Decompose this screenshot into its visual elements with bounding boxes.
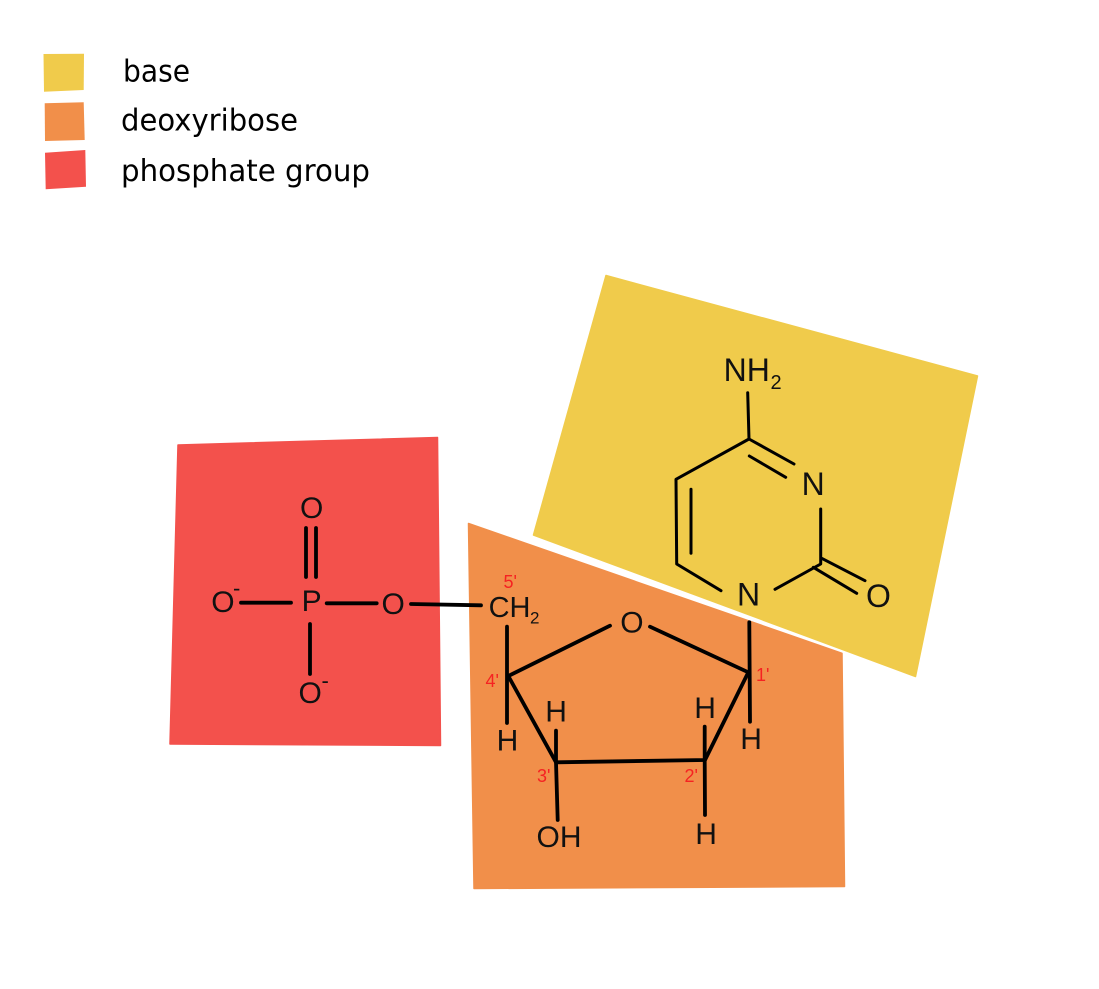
deoxyribose structure: 1' — [756, 665, 769, 685]
deoxyribose structure — [486, 572, 769, 854]
sugar ring bonds — [508, 626, 748, 762]
legend swatch: deoxyribose — [45, 102, 85, 141]
carbon numbers: 5' — [504, 572, 517, 592]
base structure: O — [866, 578, 891, 614]
panel: phosphate group — [170, 438, 440, 746]
phosphate structure: P — [302, 585, 322, 618]
legend label: deoxyribose: deoxyribose — [121, 104, 298, 138]
deoxyribose structure: 3' — [537, 766, 550, 786]
deoxyribose structure: H — [740, 723, 762, 756]
base structure — [676, 352, 891, 614]
phosphate structure: O — [298, 677, 322, 710]
substituent bonds — [507, 622, 750, 820]
deoxyribose structure: 2 — [530, 608, 539, 628]
phosphate structure: O — [382, 588, 405, 621]
deoxyribose structure: 2' — [684, 766, 698, 786]
base structure: N — [737, 577, 760, 613]
deoxyribose structure: H — [695, 818, 717, 851]
deoxyribose structure: H — [694, 692, 716, 725]
phosphate structure — [211, 492, 481, 710]
legend label: phosphate group: phosphate group — [121, 154, 370, 189]
legend — [44, 54, 370, 189]
deoxyribose structure: O — [620, 606, 644, 640]
atom labels: NH — [724, 352, 770, 388]
deoxyribose structure: H — [497, 725, 518, 758]
legend label: base: base — [123, 54, 190, 90]
cytosine ring bonds — [676, 393, 865, 593]
phosphate structure: O — [211, 586, 235, 619]
panel: base — [534, 276, 978, 676]
deoxyribose structure: OH — [536, 821, 582, 854]
deoxyribose structure: 4' — [486, 671, 499, 691]
phosphate structure: - — [233, 576, 240, 601]
base structure: 2 — [770, 372, 782, 394]
atom labels: O — [300, 492, 323, 525]
legend swatch: base — [44, 54, 84, 92]
base structure: N — [802, 466, 825, 502]
atom labels: CH — [489, 592, 530, 624]
phosphate structure: - — [322, 668, 329, 693]
deoxyribose structure: H — [545, 696, 567, 729]
legend swatch: phosphate group — [45, 150, 86, 189]
panel: deoxyribose — [468, 524, 844, 888]
phosphate bonds — [241, 528, 481, 674]
